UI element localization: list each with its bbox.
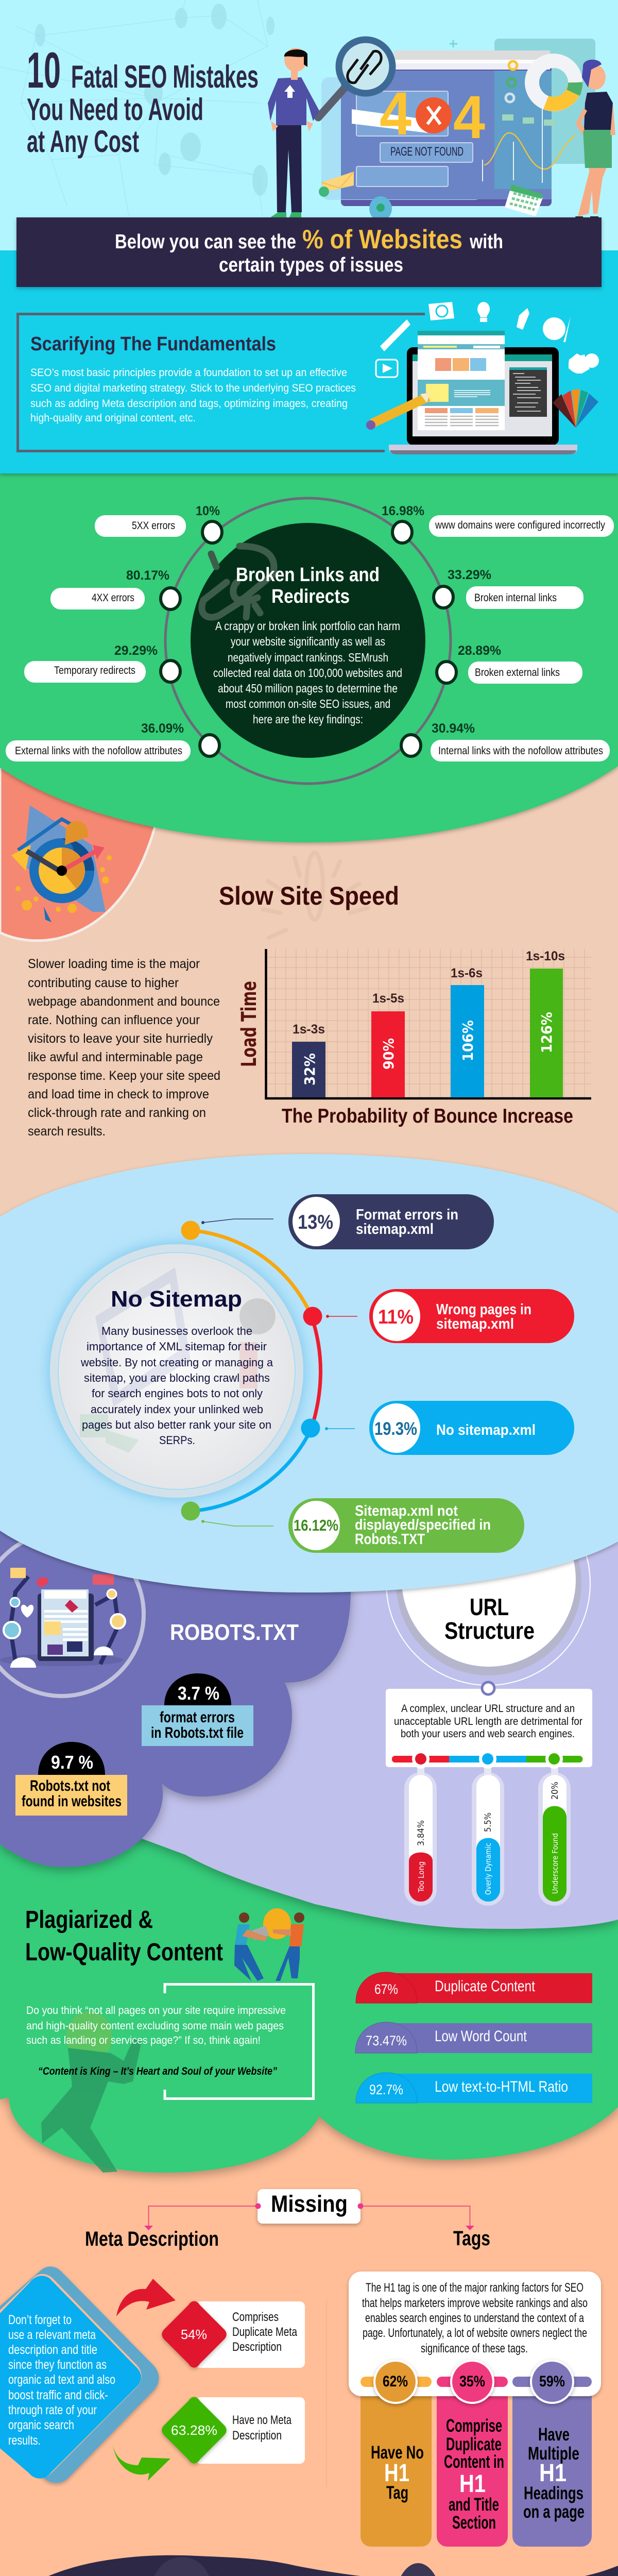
label: 80.17% 4XX errors: 80.17%: [126, 568, 169, 583]
card: 63.28% no meta: Description: [232, 2429, 282, 2443]
bar: low word count 73.47%: [355, 2022, 592, 2053]
column: 59% multiple h1: on a page: [523, 2502, 585, 2522]
stat: 9.7% not found: 9.7 %: [51, 1752, 93, 1773]
blue diamond: organic search: [8, 2418, 74, 2432]
card: 63.28% no meta: Have no Meta: [232, 2413, 291, 2427]
tube: overly dynamic 5.5%: [472, 1749, 504, 1906]
column: 59% multiple h1: Multiple: [528, 2444, 579, 2464]
arrow: red curved: [116, 2279, 176, 2316]
ring: [165, 498, 451, 784]
heading: Slow Site Speed: [219, 882, 399, 910]
central circle: sitemap, you are blocking crawl paths: [84, 1371, 270, 1384]
stat: 3.7% format errors: format errors: [160, 1709, 235, 1726]
pill: 11% wrong pages: Wrong pages in: [436, 1301, 531, 1318]
donut chart: [532, 61, 575, 104]
dark centre circle: [191, 523, 425, 758]
column: 62% have no h1 tag: [360, 2391, 432, 2547]
label: 29.29% temporary redirects: Temporary redirects: [54, 665, 135, 676]
pill: 13% format errors: [288, 1194, 494, 1249]
body text: such as landing or services page?” If so, think again!: [26, 2035, 261, 2046]
banner: percent of websites: certain types of issues: [219, 254, 403, 276]
connectors: [201, 1219, 357, 1526]
body text: SEO and digital marketing strategy. Stick to the underlying SEO practices: [30, 382, 356, 394]
panel: footer: [0, 2555, 618, 2576]
pill: 19.3% no sitemap: No sitemap.xml: [436, 1422, 536, 1438]
card: 54% duplicate meta: 54%: [181, 2327, 207, 2342]
coral corner: [0, 742, 170, 941]
second four: 4: [453, 83, 485, 151]
pill: 11% wrong pages: sitemap.xml: [436, 1316, 514, 1332]
body text: [27, 957, 220, 1139]
small dials: [506, 61, 517, 102]
bar: low word count 73.47%: Low Word Count: [435, 2028, 527, 2045]
bar: duplicate content 67%: [356, 1972, 592, 2003]
teal panel: [494, 39, 595, 164]
pill: 13% format errors: 13%: [298, 1211, 333, 1233]
page not found label: PAGE NOT FOUND: [390, 145, 464, 159]
panel: scarifying the fundamentals: [0, 250, 618, 473]
column: 35% duplicate h1: [437, 2391, 508, 2547]
panel: plagiarized and low-quality content: [0, 1752, 618, 2173]
wave line: [484, 133, 576, 169]
card: 63.28% no meta: 63.28%: [171, 2422, 217, 2438]
tube: too long 3.84%: 3.84%: [416, 1820, 426, 1846]
illustration: two people with bulb: [234, 1908, 304, 1981]
red cross circle: [416, 97, 452, 133]
body text: and load time in check to improve: [28, 1087, 209, 1101]
heading circle: Structure: [444, 1617, 535, 1644]
tube: underscore found 20%: [538, 1749, 571, 1906]
blue diamond: boost traffic and click-: [8, 2388, 108, 2402]
panel: lavender background for url structure: [0, 1494, 618, 1929]
bar chart: 1s-5s: [372, 991, 404, 1006]
label: 30.94% internal nofollow: 30.94%: [432, 721, 475, 736]
body text: [30, 367, 356, 424]
missing label: Missing: [271, 2191, 348, 2217]
column: 35% duplicate h1: Section: [452, 2513, 496, 2533]
browser window: [341, 59, 552, 206]
label: 10% 5XX errors: [95, 504, 220, 537]
card: 63.28% no meta: [162, 2397, 305, 2464]
bar: duplicate content 67%: Duplicate Content: [435, 1978, 536, 1995]
dark centre circle: Redirects: [271, 586, 350, 607]
column: 62% have no h1 tag: Have No: [371, 2443, 424, 2463]
dark centre circle: negatively impact rankings. SEMrush: [228, 651, 388, 664]
body text: rate. Nothing can influence your: [28, 1013, 200, 1027]
label: 10% 5XX errors: 5XX errors: [132, 520, 175, 532]
body text: [26, 2005, 286, 2046]
pill: 16.12% not displayed: 16.12%: [294, 1516, 338, 1534]
pill: 13% format errors: sitemap.xml: [356, 1221, 434, 1238]
pill: 19.3% no sitemap: [369, 1401, 574, 1455]
icon: clock: [11, 805, 112, 922]
title: Fatal SEO Mistakes: [71, 59, 259, 95]
body text: search results.: [28, 1124, 106, 1139]
label: 33.29% broken internal: 33.29%: [448, 568, 491, 582]
blue diamond: since they function as: [8, 2358, 107, 2372]
heading: Plagiarized &: [25, 1906, 153, 1934]
bar chart: The Probability of Bounce Increase: [282, 1105, 573, 1127]
panel: missing meta description and tags: [0, 2189, 601, 2547]
description card: unacceptable URL length are detrimental for: [394, 1716, 582, 1727]
label: 30.94% internal nofollow: [431, 721, 610, 761]
timeline arc: [191, 1230, 320, 1511]
divider: [326, 2300, 327, 2487]
column: 35% duplicate h1: Content in: [444, 2452, 504, 2472]
bar chart: 1s-3s: [293, 1022, 325, 1037]
title: You Need to Avoid: [27, 92, 203, 127]
illustration: tablet with robot arms: [0, 1568, 125, 1668]
column: 35% duplicate h1: and Title: [449, 2495, 499, 2515]
segment bar: [392, 1756, 583, 1762]
body text: SEO’s most basic principles provide a foundation to set up an effective: [30, 367, 347, 379]
dark centre circle: here are the key findings:: [253, 713, 363, 726]
heading: tags: Tags: [453, 2227, 490, 2250]
card: 54% duplicate meta: Description: [232, 2340, 282, 2354]
decorative network: [0, 0, 268, 216]
label: 16.98% www domains: 16.98%: [382, 504, 424, 518]
body text: Slower loading time is the major: [28, 957, 200, 971]
bar: duplicate content 67%: 67%: [374, 1981, 398, 1997]
ghost running figure: [41, 2011, 142, 2173]
tags description card: significance of these tags.: [421, 2342, 528, 2355]
bar chart: [237, 949, 591, 1127]
bar chart: 1s-10s: [526, 949, 565, 963]
blue diamond: through rate of your: [8, 2403, 97, 2417]
title: at Any Cost: [27, 124, 139, 159]
column: 62% have no h1 tag: H1: [384, 2460, 409, 2487]
column: 35% duplicate h1: Duplicate: [446, 2434, 502, 2454]
central circle: accurately index your unlinked web: [91, 1403, 263, 1416]
label: 28.89% broken external: Broken external links: [475, 667, 560, 679]
heading circle: URL: [470, 1594, 509, 1620]
description card: both your users and web search engines.: [401, 1728, 575, 1740]
plus sign: [450, 40, 457, 47]
tube: underscore found 20%: Underscore Found: [551, 1833, 560, 1894]
panel: robots.txt: [0, 1520, 351, 1867]
card: 54% duplicate meta: [162, 2301, 305, 2368]
magnifier with broken chain: [318, 40, 392, 117]
woman: [575, 60, 615, 219]
label: 28.89% broken external: 28.89%: [458, 643, 501, 658]
bar chart: 1s-6s: [451, 966, 483, 980]
stat: 3.7% format errors: 3.7 %: [178, 1683, 219, 1704]
description card: [386, 1689, 592, 1767]
label: 36.09% external nofollow: [6, 721, 191, 761]
body text: Do you think “not all pages on your site require impressive: [26, 2005, 286, 2016]
central circle: for search engines bots to not only: [92, 1387, 263, 1400]
heading: Low-Quality Content: [25, 1939, 223, 1966]
bar chart: 106%: [459, 1020, 476, 1061]
blue diamond: description and title: [8, 2343, 97, 2357]
badge: 59%: 59%: [539, 2373, 565, 2390]
central circle: Many businesses overlook the: [101, 1325, 252, 1337]
column: 59% multiple h1: Headings: [524, 2483, 583, 2503]
pill: 11% wrong pages: [369, 1289, 574, 1343]
body text: visitors to leave your site hurriedly: [28, 1031, 213, 1046]
heading circle: [386, 1481, 590, 1685]
label: 80.17% 4XX errors: 4XX errors: [92, 592, 134, 604]
tube: overly dynamic 5.5%: Overly Dynamic: [484, 1843, 493, 1895]
frame: [18, 314, 425, 451]
panel: no sitemap: [0, 1154, 618, 1592]
banner: percent of websites: [16, 217, 602, 287]
bar chart: Load Time: [237, 981, 261, 1067]
illustration: laptop with design tools: [366, 302, 599, 454]
pill: 16.12% not displayed: displayed/specified in: [355, 1517, 491, 1533]
badge: 35%: [437, 2360, 508, 2404]
dark centre circle: collected real data on 100,000 websites and: [213, 666, 402, 680]
pill: 16.12% not displayed: Sitemap.xml not: [355, 1503, 458, 1519]
body text: like awful and interminable page: [28, 1050, 203, 1064]
dark centre circle: your website significantly as well as: [231, 635, 385, 648]
body text: such as adding Meta description and tags, optimizing images, creating: [30, 398, 348, 410]
label: 16.98% www domains: [382, 504, 614, 537]
heading: meta description: Meta Description: [85, 2228, 219, 2250]
stat: 9.7% not found: found in websites: [22, 1793, 122, 1810]
central circle: website. By not creating or managing a: [80, 1356, 273, 1369]
stat: 9.7% not found: Robots.txt not: [30, 1777, 110, 1794]
title: 10: [27, 42, 61, 98]
central circle: No Sitemap: [111, 1286, 242, 1312]
label: 10% 5XX errors: 10%: [196, 504, 220, 518]
bar: low text-to-html 92.7%: [356, 2073, 592, 2103]
bar: low text-to-html 92.7%: Low text-to-HTML Ratio: [435, 2078, 568, 2095]
body text: and high-quality content excluding some main web pages: [26, 2020, 284, 2032]
label: 36.09% external nofollow: 36.09%: [141, 721, 184, 736]
node dots: [181, 1221, 322, 1521]
column: 59% multiple h1: H1: [539, 2460, 566, 2487]
column: 35% duplicate h1: Comprise: [446, 2416, 502, 2436]
dark centre circle: Broken Links and: [236, 564, 380, 586]
panel: header hero: [0, 0, 618, 250]
badge: 35%: 35%: [459, 2373, 485, 2390]
bar chart: 32%: [301, 1053, 318, 1086]
tube: underscore found 20%: 20%: [550, 1782, 560, 1800]
blue diamond: Don’t forget to: [8, 2313, 72, 2327]
man: [268, 48, 319, 217]
pill: 16.12% not displayed: [288, 1498, 524, 1553]
central circle: importance of XML sitemap for their: [87, 1340, 267, 1353]
blue diamond: use a relevant meta: [8, 2328, 96, 2342]
heading: ROBOTS.TXT: [170, 1620, 299, 1645]
label: 33.29% broken internal: Broken internal links: [474, 592, 557, 604]
pin: [369, 196, 392, 221]
blue diamond: results.: [8, 2433, 41, 2448]
quote: “Content is King – It’s Heart and Soul of your Website”: [38, 2065, 277, 2077]
central circle: [50, 1244, 303, 1498]
label: 29.29% temporary redirects: [24, 643, 158, 683]
bar: low word count 73.47%: 73.47%: [366, 2033, 407, 2048]
column: 35% duplicate h1: H1: [459, 2470, 486, 2498]
arrow: to tags: [357, 2203, 474, 2230]
banner: percent of websites: Below you can see the: [115, 231, 296, 253]
panel: broken links and redirects: [0, 464, 618, 842]
big 404: 4: [380, 80, 411, 148]
dark centre circle: about 450 million pages to determine the: [218, 682, 398, 695]
heading: [25, 1906, 223, 1966]
bar chart: 126%: [538, 1012, 555, 1053]
body text: contributing cause to higher: [28, 976, 179, 990]
badge: 59%: [512, 2360, 592, 2404]
column: 59% multiple h1: Have: [538, 2425, 570, 2445]
column: 62% have no h1 tag: Tag: [386, 2483, 408, 2503]
central circle: SERPs.: [159, 1434, 195, 1447]
pill: 19.3% no sitemap: 19.3%: [374, 1419, 417, 1439]
dark centre circle: most common on-site SEO issues, and: [226, 697, 390, 710]
calendar: [505, 184, 543, 216]
central circle: pages but also better rank your site on: [82, 1418, 271, 1431]
label: 33.29% broken internal: [448, 568, 583, 609]
watermark bulb: [263, 853, 368, 938]
tags description card: [349, 2272, 601, 2396]
pill: 11% wrong pages: 11%: [378, 1306, 414, 1328]
panel: url structure: [386, 1481, 592, 1906]
label: 80.17% 4XX errors: [50, 568, 169, 609]
label: 36.09% external nofollow: External links with the nofollow attributes: [15, 745, 182, 757]
arrow: green curved: [112, 2443, 170, 2481]
body text: high-quality and original content, etc.: [30, 412, 196, 424]
tube: overly dynamic 5.5%: 5.5%: [483, 1812, 493, 1832]
tube: too long 3.84%: Too Long: [417, 1861, 426, 1893]
stat: 3.7% format errors: [142, 1673, 253, 1746]
arrow: to meta description: [144, 2203, 261, 2230]
white bracket frame: [165, 1985, 313, 2099]
card: 54% duplicate meta: Comprises: [232, 2310, 279, 2324]
body text: response time. Keep your site speed: [28, 1069, 220, 1083]
envelope: [319, 172, 354, 197]
label: 28.89% broken external: [458, 643, 582, 684]
banner: percent of websites: with: [469, 231, 503, 253]
bar chart: 90%: [380, 1038, 397, 1070]
panel: slow site speed: [0, 742, 591, 1139]
node dots: [161, 521, 456, 756]
title: [27, 42, 259, 159]
stat: 3.7% format errors: in Robots.txt file: [151, 1724, 244, 1741]
dark centre circle: A crappy or broken link portfolio can harm: [215, 619, 400, 633]
badge: 62%: 62%: [383, 2373, 408, 2390]
badge: 62%: [360, 2360, 432, 2404]
pill: 13% format errors: Format errors in: [356, 1207, 458, 1223]
column: 59% multiple h1: [512, 2391, 592, 2547]
page background: peach lower area: [0, 2009, 618, 2576]
blue diamond: [0, 2266, 159, 2483]
bar: low text-to-html 92.7%: 92.7%: [369, 2082, 403, 2097]
illustration ring: [0, 1532, 144, 1696]
missing label: [258, 2189, 360, 2224]
panel: slow site speed background: [0, 747, 618, 1262]
stat: 9.7% not found: [15, 1742, 127, 1816]
connector knob: [482, 1682, 494, 1694]
pill: 16.12% not displayed: Robots.TXT: [355, 1531, 425, 1548]
blue diamond: organic ad text and also: [8, 2372, 115, 2387]
body text: webpage abandonment and bounce: [27, 994, 220, 1009]
heading: Scarifying The Fundamentals: [30, 333, 276, 355]
illustration: 404 page not found: [268, 39, 615, 221]
body text: click-through rate and ranking on: [28, 1106, 206, 1120]
tube: too long 3.84%: [404, 1749, 437, 1906]
description card: A complex, unclear URL structure and an: [401, 1703, 575, 1715]
banner: percent of websites: % of Websites: [302, 225, 462, 255]
label: 29.29% temporary redirects: 29.29%: [114, 643, 158, 658]
card: 54% duplicate meta: Duplicate Meta: [232, 2325, 298, 2339]
